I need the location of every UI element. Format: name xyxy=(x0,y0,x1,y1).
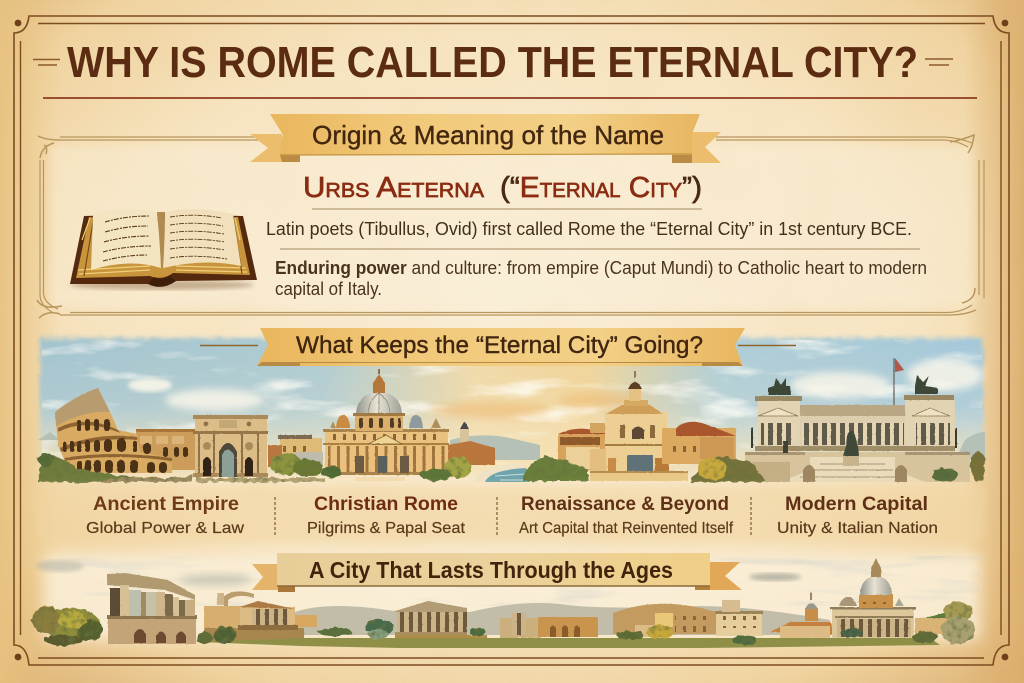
ground strip xyxy=(200,638,940,648)
landscape: what keeps the eternal city going xyxy=(38,338,985,482)
heading: Urbs Aeterna xyxy=(303,172,702,204)
river xyxy=(473,462,530,482)
trees xyxy=(32,602,975,645)
building: city blocks xyxy=(500,593,842,638)
text: Latin poets: Latin poets (Tibullus, Ovid) first called Rome the “Eternal City” in 1st century BCE. xyxy=(266,219,912,239)
banner: what keeps the eternal city going xyxy=(200,328,796,366)
heading: Urbs Aeterna: (“Eternal City”) xyxy=(500,172,702,204)
building: ruined arcade xyxy=(107,573,197,644)
label: Christian Rome: Christian Rome xyxy=(314,494,458,515)
banner: origin and meaning xyxy=(250,114,721,163)
banner text: What Keeps the “Eternal City” Going? xyxy=(296,332,703,359)
quadriga statues xyxy=(768,375,938,395)
building: Greek temple xyxy=(395,601,487,643)
flag xyxy=(893,358,895,405)
title: WHY IS ROME CALLED THE ETERNAL CITY? xyxy=(67,38,918,87)
scribbled handwriting xyxy=(103,215,227,261)
label: Renaissance and Beyond: Renaissance & Beyond xyxy=(521,494,729,515)
title flourish right xyxy=(925,59,953,65)
label: Modern Capital xyxy=(777,494,938,537)
banner text: Origin & Meaning of the Name xyxy=(312,120,664,150)
building: St Peter's Basilica xyxy=(323,369,495,481)
building: hill ruins xyxy=(204,591,317,642)
distant hills xyxy=(295,603,830,635)
title rule xyxy=(43,97,977,99)
sky xyxy=(40,338,983,473)
panel frame xyxy=(37,135,984,318)
label: Modern Capital: Modern Capital xyxy=(785,494,928,515)
label: Renaissance and Beyond: Art Capital that Reinvented Itself xyxy=(519,520,734,537)
label: Christian Rome xyxy=(307,494,466,537)
building: roman houses xyxy=(268,435,323,468)
sky xyxy=(44,554,980,640)
divider rules xyxy=(280,209,920,249)
distant hills xyxy=(38,432,985,460)
label: Ancient Empire: Global Power & Law xyxy=(86,520,244,537)
clouds xyxy=(36,556,980,606)
label: Ancient Empire xyxy=(86,494,244,537)
building: triumphal arch xyxy=(193,415,268,477)
text: enduring power xyxy=(275,258,927,299)
building: Renaissance church xyxy=(558,371,736,481)
label: Modern Capital: Unity & Italian Nation xyxy=(777,520,938,537)
era labels xyxy=(38,486,985,542)
label: Christian Rome: Pilgrims & Papal Seat xyxy=(307,520,466,537)
skyline panel: a city that lasts through the ages xyxy=(32,554,980,648)
text: enduring power: Enduring power and culture: from empire (Caput Mundi) to Catholic heart to modern xyxy=(275,258,927,278)
banner: a city that lasts through the ages xyxy=(252,553,742,592)
icon: open book xyxy=(70,209,257,290)
banner text: A City That Lasts Through the Ages xyxy=(309,557,673,583)
label: Ancient Empire: Ancient Empire xyxy=(93,494,239,515)
building: St Peter's dome xyxy=(830,558,965,638)
building: Colosseum xyxy=(55,388,195,473)
label: Renaissance and Beyond xyxy=(519,494,734,537)
title flourish left xyxy=(33,60,60,65)
panel: origin and meaning of the name xyxy=(37,135,984,318)
heading: Urbs Aeterna: Urbs Aeterna xyxy=(303,172,485,204)
clouds xyxy=(42,340,983,465)
trees and ground xyxy=(38,450,985,482)
text: enduring power: capital of Italy. xyxy=(275,279,382,299)
building: Vittoriano monument xyxy=(745,358,970,482)
lamp posts xyxy=(752,428,956,448)
